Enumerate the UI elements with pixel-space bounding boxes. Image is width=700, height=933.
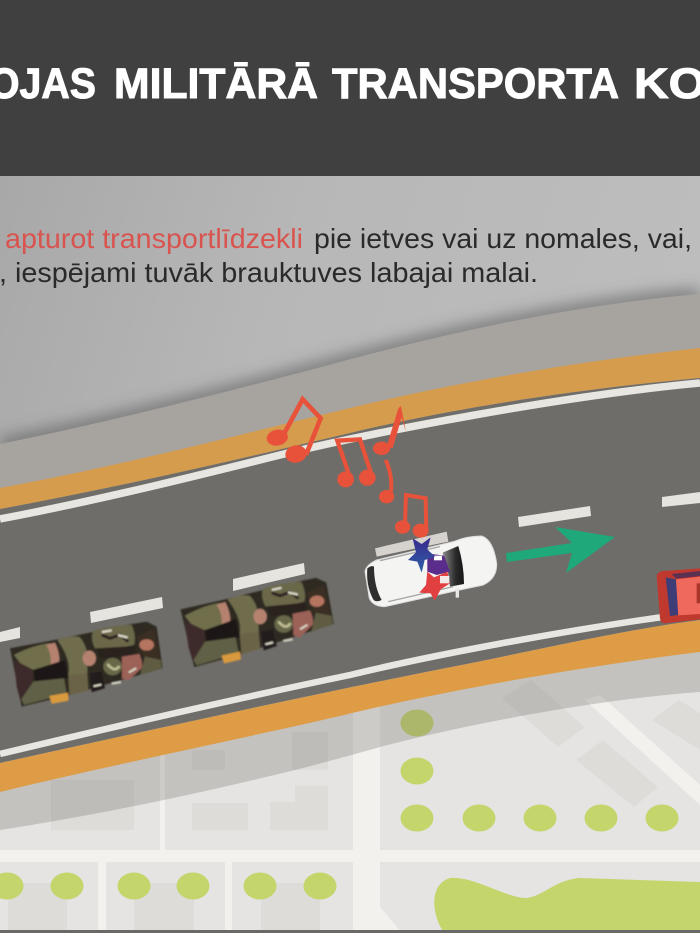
roof light bar [375, 532, 448, 557]
road asphalt [0, 378, 700, 763]
centre lane dashes [0, 492, 700, 642]
title: KO [634, 60, 700, 108]
bottom edge line [0, 930, 700, 933]
instruction text [0, 223, 692, 288]
upper road shoulder [0, 294, 700, 540]
red car [657, 568, 700, 623]
lower road shoulder [0, 640, 700, 830]
instruction text: , iespējami tuvāk brauktuves labajai malai. [0, 257, 538, 288]
green direction arrow [506, 527, 615, 573]
purple light block [427, 553, 450, 575]
note: flagged [373, 406, 406, 455]
green tree dots [0, 710, 678, 900]
map buildings [8, 680, 700, 930]
note: large beamed [265, 399, 321, 464]
military truck: rear [10, 622, 163, 707]
blue siren star [408, 537, 435, 573]
music notes [265, 399, 429, 538]
windshield [443, 546, 464, 587]
car body [365, 536, 497, 607]
diagonal street [585, 695, 700, 805]
header bar [0, 0, 700, 176]
roof rails [380, 547, 453, 602]
military truck: front [180, 577, 335, 668]
orange kerb: lower [0, 620, 700, 792]
side mirrors [456, 588, 459, 598]
title: MILITĀRĀ [114, 60, 318, 108]
shadow along the upper road edge [0, 296, 700, 446]
city map [0, 640, 700, 933]
instruction text: apturot transportlīdzekli [5, 223, 303, 254]
rear window [367, 566, 382, 601]
instruction text: pie ietves vai uz nomales, vai, [314, 223, 692, 254]
red siren star [419, 572, 450, 601]
note: near car [395, 495, 429, 538]
note: medium beamed [337, 439, 376, 487]
title: TRANSPORTA [332, 60, 619, 108]
green park [434, 878, 700, 933]
title [0, 60, 700, 108]
lower white edge line [0, 612, 700, 754]
upper white edge line [0, 383, 700, 519]
orange kerb: upper [0, 348, 700, 509]
map blocks [0, 640, 700, 933]
note: small [379, 460, 394, 503]
white escort car [365, 532, 497, 607]
